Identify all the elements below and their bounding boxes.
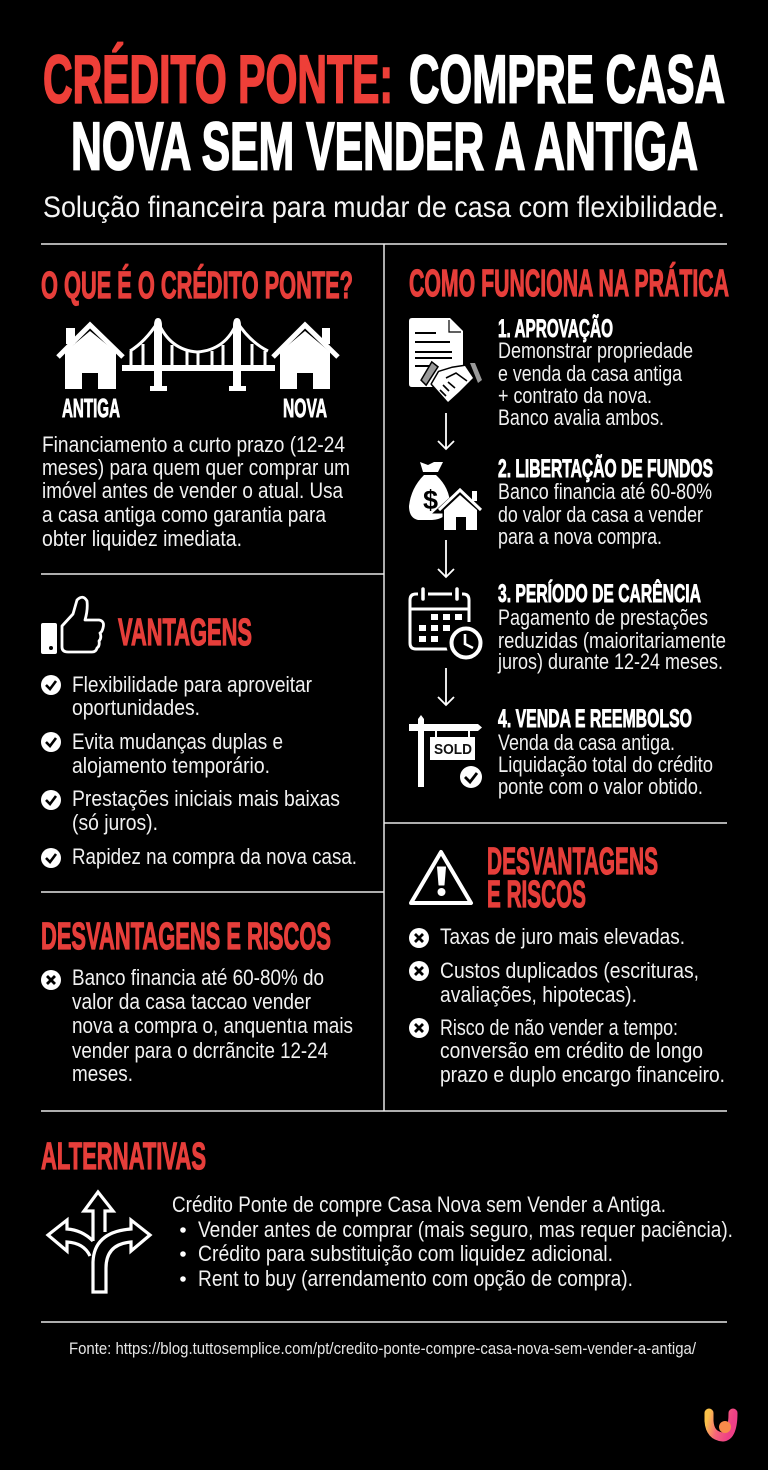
text: risk description: nova a compra o, anquentıa mais [72, 1013, 353, 1038]
text: risk description: meses. [72, 1061, 133, 1086]
item 1: Flexibilidade para aproveitar [72, 672, 312, 697]
text: step 2: Banco financia até 60-80% [498, 479, 712, 504]
text: step 2 [498, 453, 713, 549]
text: alternativas intro: Crédito Ponte de compre Casa Nova sem Vender a Antiga. [172, 1192, 666, 1217]
list: alternativas [180, 1217, 733, 1291]
text: definition: a casa antiga como garantia para [42, 502, 327, 527]
text: definition: imóvel antes de vender o atual. Usa [42, 478, 344, 503]
text: step 4: ponte com o valor obtido. [498, 774, 703, 799]
text: risk description: Banco financia até 60-80% do [72, 965, 324, 990]
icon: money bag and house: $ [423, 485, 438, 515]
heading: vantagens: VANTAGENS [118, 612, 252, 654]
item 3: Prestações iniciais mais baixas [72, 786, 340, 811]
icon: money bag and house [409, 462, 482, 530]
panel: desvantagens e riscos left [41, 916, 353, 1086]
text: step 1 [498, 313, 693, 430]
icon: x bullet [41, 970, 61, 990]
text: step 2: para a nova compra. [498, 524, 662, 549]
text: step 3: Pagamento de prestações [498, 605, 708, 630]
risk item 3 [409, 1015, 725, 1087]
text: step 1: e venda da casa antiga [498, 361, 683, 386]
icon: warning triangle [411, 852, 471, 903]
logo [709, 1413, 733, 1437]
label: antiga: ANTIGA [62, 393, 120, 423]
panel: como funciona na prática [409, 261, 729, 799]
title: CRÉDITO PONTE: [43, 42, 393, 118]
risk item 2: avaliações, hipotecas). [440, 982, 637, 1007]
list: alternativas: Crédito para substituição com liquidez adicional. [198, 1241, 613, 1266]
text: step 4: Liquidação total do crédito [498, 752, 713, 777]
label: nova: NOVA [283, 393, 327, 423]
text: step 4 [498, 705, 713, 799]
risk item 2: Custos duplicados (escrituras, [440, 958, 699, 983]
risk item 1: Taxas de juro mais elevadas. [440, 924, 685, 949]
title [43, 42, 725, 184]
heading: desvantagens: E RISCOS [487, 874, 586, 916]
heading: o que é: O QUE É O CRÉDITO PONTE? [41, 263, 353, 307]
risk item 3: prazo e duplo encargo financeiro. [440, 1062, 725, 1087]
text: step 1: 1. APROVAÇÃO [498, 313, 613, 343]
arrow 3 [438, 668, 454, 705]
item 1 [41, 672, 312, 720]
item 2: Evita mudanças duplas e [72, 729, 283, 754]
icon: three way arrows [48, 1192, 150, 1292]
icon: sold sign [409, 715, 482, 788]
text: step 3 [497, 578, 726, 674]
item 1: oportunidades. [72, 695, 200, 720]
text: risk description: valor da casa taccao vender [72, 989, 311, 1014]
source line: Fonte: https://blog.tuttosemplice.com/pt/credito-ponte-compre-casa-nova-sem-vender-a-antiga/ [69, 1339, 696, 1358]
list: vantagens [41, 672, 357, 869]
panel: o que é o crédito ponte [41, 263, 353, 551]
panel: alternativas [41, 1136, 733, 1292]
heading: desvantagens e riscos: DESVANTAGENS E RISCOS [41, 916, 331, 958]
item 3: (só juros). [72, 810, 158, 835]
text: step 3: juros) durante 12-24 meses. [497, 649, 723, 674]
item 2 [41, 729, 283, 778]
text: definition [42, 432, 350, 551]
arrow 2 [438, 540, 454, 577]
icon: sold sign: SOLD [434, 742, 472, 758]
icon: thumbs up [41, 597, 104, 654]
icon: calendar and clock [410, 589, 486, 663]
risk item 3: Risco de não vender a tempo: [440, 1015, 678, 1040]
item 4: Rapidez na compra da nova casa. [72, 844, 357, 869]
list: alternativas: Rent to buy (arrendamento com opção de compra). [198, 1266, 633, 1291]
text: definition: Financiamento a curto prazo (12-24 [42, 432, 345, 457]
text: definition: meses) para quem quer comprar um [42, 455, 350, 480]
text: step 1: Demonstrar propriedade [498, 338, 693, 363]
text: step 1: Banco avalia ambos. [498, 405, 664, 430]
panel: desvantagens e riscos right [409, 841, 725, 1087]
risk item 3: conversão em crédito de longo [440, 1038, 703, 1063]
text: step 4: Venda da casa antiga. [498, 730, 675, 755]
item 2: alojamento temporário. [72, 753, 270, 778]
panel: vantagens [41, 597, 357, 869]
text: step 1: + contrato da nova. [498, 383, 652, 408]
text: step 3: reduzidas (maioritariamente [498, 628, 726, 653]
text: risk description: vender para o dcrrãncite 12-24 [72, 1038, 328, 1063]
icon: houses and bridge [58, 318, 338, 391]
arrow 1 [438, 413, 454, 449]
text: definition: obter liquidez imediata. [42, 526, 242, 551]
icon: document and handshake [409, 318, 482, 402]
text: risk description [72, 965, 353, 1086]
heading: alternativas: ALTERNATIVAS [41, 1136, 206, 1178]
item 3 [41, 786, 340, 835]
risk item 2 [409, 958, 699, 1007]
text: step 2: do valor da casa a vender [498, 502, 703, 527]
list: riscos [409, 924, 725, 1087]
heading: desvantagens [487, 841, 658, 916]
